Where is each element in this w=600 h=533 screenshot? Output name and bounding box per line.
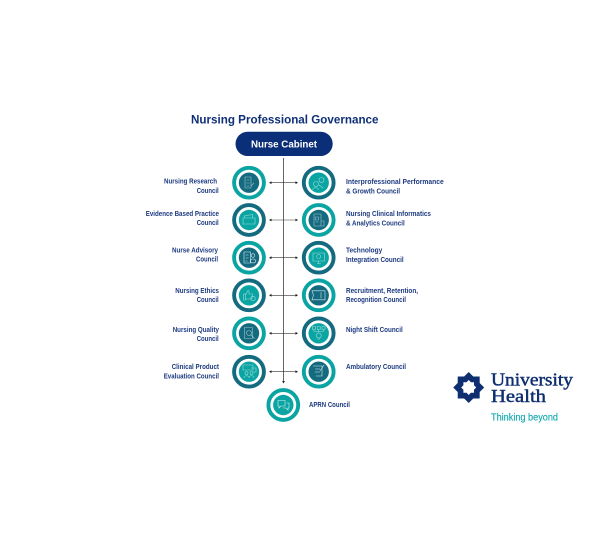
council: Nursing Clinical Informatics and Analytics: & Analytics Council (346, 220, 405, 228)
council: Technology Integration: Integration Council (346, 256, 404, 264)
council: Nurse Advisory: Council (196, 256, 218, 264)
council: Clinical Product Evaluation: Evaluation Council (164, 372, 219, 380)
council: Nursing Ethics: Council (197, 296, 219, 304)
logo: University Health (453, 370, 573, 424)
council: Nursing Research: Nursing Research (164, 178, 217, 186)
council: Nursing Ethics (175, 280, 264, 310)
council: Nursing Research (164, 168, 264, 198)
council: Nurse Advisory: Nurse Advisory (172, 246, 218, 254)
logo: University Health: Health (491, 386, 546, 406)
council: Recruitment, Retention, Recognition: Recognition Council (346, 296, 406, 304)
council: Night Shift (304, 318, 403, 348)
logo: University Health: Thinking beyond (491, 413, 558, 424)
council: Evidence Based Practice: Council (197, 219, 219, 227)
council: Technology Integration: Technology (346, 246, 382, 254)
council: Nursing Quality: Council (197, 335, 219, 343)
council: Nursing Quality (173, 318, 264, 348)
connector: vertical trunk and arrows (269, 158, 298, 384)
council: Nursing Research: Council (197, 187, 219, 195)
council: Ambulatory: Ambulatory Council (346, 363, 406, 371)
logo: University Health: University (491, 370, 573, 390)
heading pill: Nurse Cabinet (236, 132, 333, 156)
council: Nursing Quality: Nursing Quality (173, 326, 219, 334)
council: Interprofessional Performance and Growth: Interprofessional Performance (346, 178, 444, 186)
title: Nursing Professional Governance (191, 113, 379, 127)
council: APRN (268, 390, 350, 420)
council: Recruitment, Retention, Recognition (304, 280, 418, 310)
council: Clinical Product Evaluation (164, 357, 264, 387)
council: Ambulatory (304, 357, 406, 387)
council: Nursing Clinical Informatics and Analytics: Nursing Clinical Informatics (346, 210, 431, 218)
council: Clinical Product Evaluation: Clinical Product (172, 363, 220, 371)
council: Night Shift: Night Shift Council (346, 326, 403, 334)
council: Recruitment, Retention, Recognition: Recruitment, Retention, (346, 287, 418, 295)
council: Nurse Advisory (172, 243, 264, 273)
icon: logo star mark (453, 372, 484, 403)
council: Nursing Ethics: Nursing Ethics (175, 287, 219, 295)
council: Technology Integration (304, 243, 404, 273)
council: APRN: APRN Council (309, 401, 350, 409)
council: Interprofessional Performance and Growth: & Growth Council (346, 188, 400, 196)
council: Interprofessional Performance and Growth (304, 168, 444, 198)
heading pill: Nurse Cabinet: Nurse Cabinet (251, 139, 318, 150)
council: Evidence Based Practice (146, 205, 264, 235)
council: Nursing Clinical Informatics and Analytics (304, 205, 431, 235)
council: Evidence Based Practice: Evidence Based Practice (146, 210, 219, 218)
